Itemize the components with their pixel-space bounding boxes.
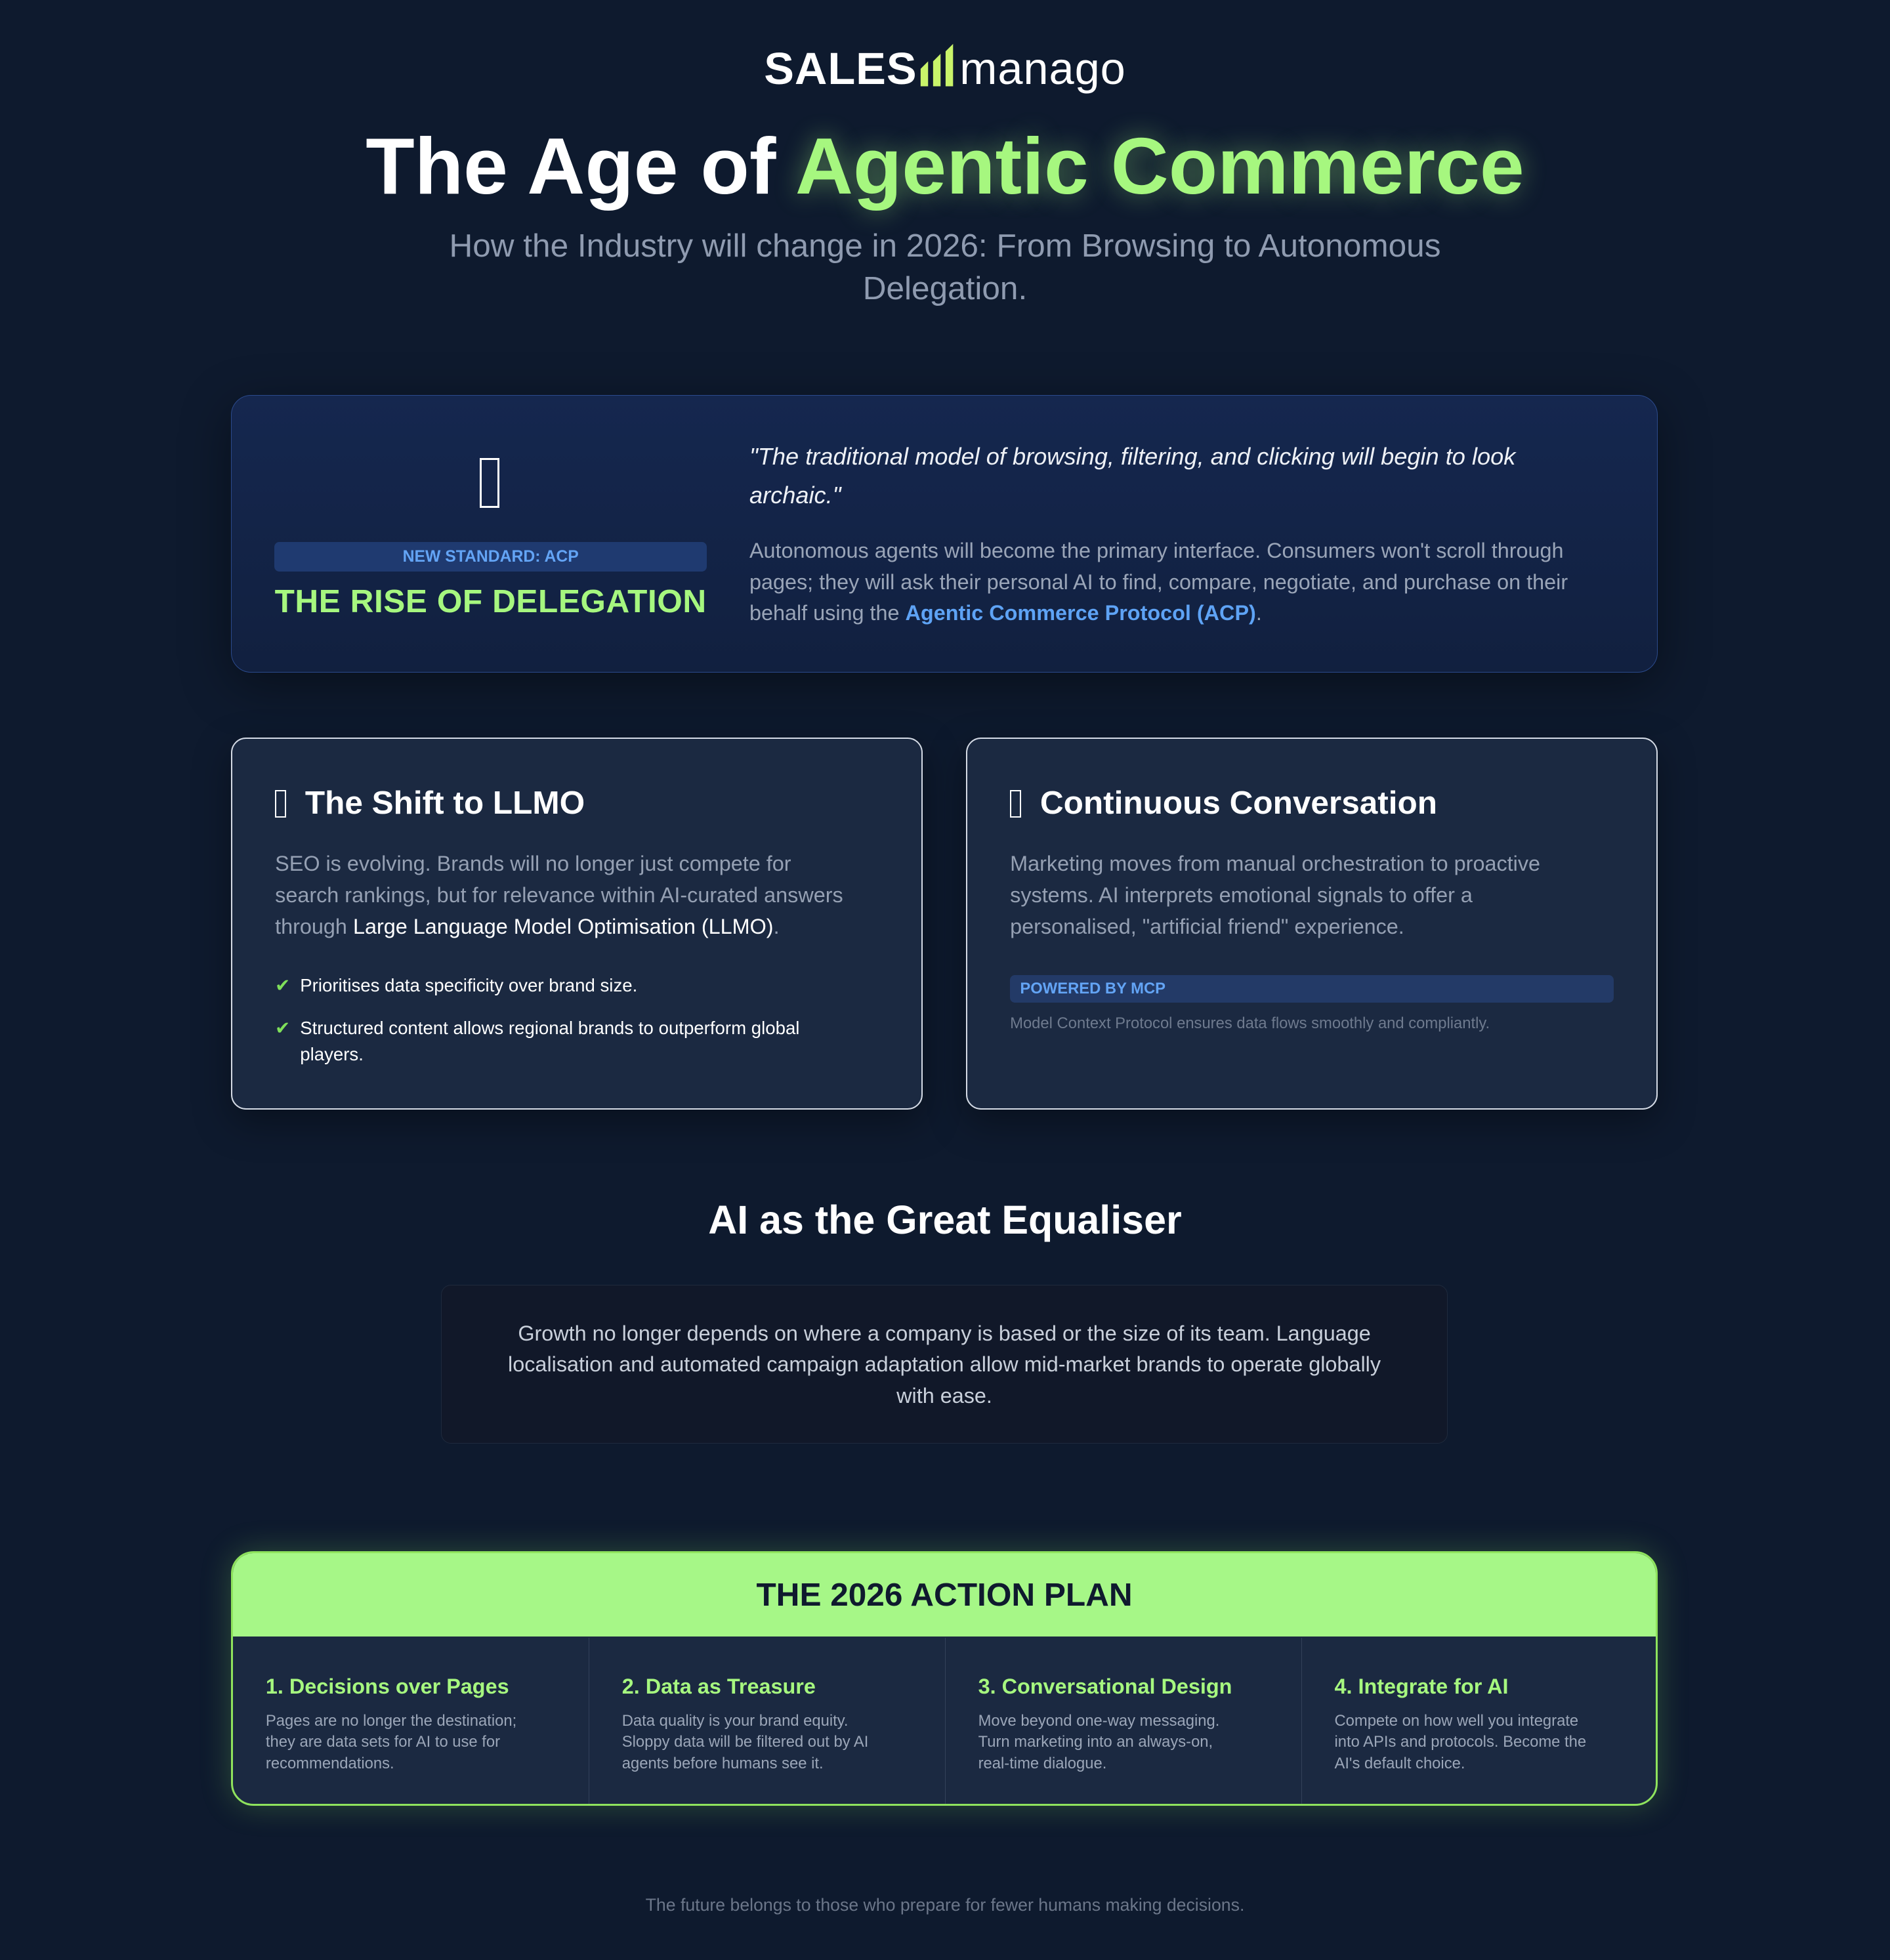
heading: Continuous Conversation	[1040, 785, 1437, 821]
badge: powered by MCP: POWERED BY MCP	[1020, 980, 1166, 997]
step 1: Pages are no longer the destination; they are data sets for AI to use for recommendations.	[266, 1712, 516, 1772]
text box: equaliser	[441, 1285, 1448, 1444]
badge: new standard	[274, 542, 707, 572]
heading: The Shift to LLMO	[305, 785, 585, 821]
checklist: Prioritises data specificity over brand size.	[300, 975, 637, 995]
header	[233, 1553, 1656, 1637]
panel: continuous conversation	[966, 738, 1658, 1110]
body: Marketing moves from manual orchestration to proactive systems. AI interprets emotional signals to offer a personalised, "artificial friend" experience.	[1010, 852, 1540, 938]
step 3: 3. Conversational Design	[978, 1675, 1232, 1698]
text box: equaliser: Growth no longer depends on where a company is based or the size of its team. Language localisation and automated campaign adaptation allow mid-market brands to operate globally with ease.	[508, 1322, 1381, 1407]
checklist: ✔	[275, 1018, 290, 1038]
step 2: Data quality is your brand equity. Sloppy data will be filtered out by AI agents before humans see it.	[622, 1712, 868, 1772]
quote: "The traditional model of browsing, filtering, and clicking will begin to look archaic."	[749, 443, 1515, 509]
badge: new standard: NEW STANDARD: ACP	[403, 548, 579, 566]
panel: shift to LLMO	[231, 738, 923, 1110]
footer: The future belongs to those who prepare for fewer humans making decisions.	[646, 1895, 1244, 1915]
subtitle: How the Industry will change in 2026: From Browsing to Autonomous Delegation.	[449, 228, 1440, 306]
step 2	[589, 1638, 946, 1808]
icon: placeholder	[480, 458, 499, 508]
panel: rise of delegation	[231, 395, 1658, 673]
heading: rise of delegation: THE RISE OF DELEGATION	[275, 583, 707, 619]
title: The Age of Agentic Commerce	[366, 121, 1524, 211]
logo: SALES manago	[764, 43, 1126, 94]
step 3: Move beyond one-way messaging. Turn marketing into an always-on, real-time dialogue.	[978, 1712, 1219, 1772]
step 3	[946, 1638, 1302, 1808]
heading: equaliser: AI as the Great Equaliser	[708, 1198, 1182, 1242]
checklist: Structured content allows regional brands to outperform global players.	[300, 1018, 799, 1064]
step 4: Compete on how well you integrate into APIs and protocols. Become the AI's default choice.	[1334, 1712, 1586, 1772]
header: THE 2026 ACTION PLAN	[756, 1577, 1133, 1613]
step 2: 2. Data as Treasure	[622, 1675, 816, 1698]
step 1: 1. Decisions over Pages	[266, 1675, 509, 1698]
checklist	[275, 975, 799, 1064]
step 1	[233, 1638, 589, 1808]
body text: Autonomous agents will become the primary interface. Consumers won't scroll through pages; they will ask their personal AI to find, compare, negotiate, and purchase on their behalf using the Agentic Commerce Protocol (ACP).	[749, 539, 1568, 625]
body: SEO is evolving. Brands will no longer just compete for search rankings, but for relevance within AI-curated answers through Large Language Model Optimisation (LLMO).	[275, 852, 843, 938]
note: Model Context Protocol ensures data flows smoothly and compliantly.	[1010, 1014, 1490, 1032]
panel: action plan	[231, 1551, 1658, 1806]
badge: powered by MCP	[1010, 975, 1614, 1003]
checklist: ✔	[275, 975, 290, 995]
step 4: 4. Integrate for AI	[1334, 1675, 1508, 1698]
step 4	[1334, 1675, 1586, 1772]
